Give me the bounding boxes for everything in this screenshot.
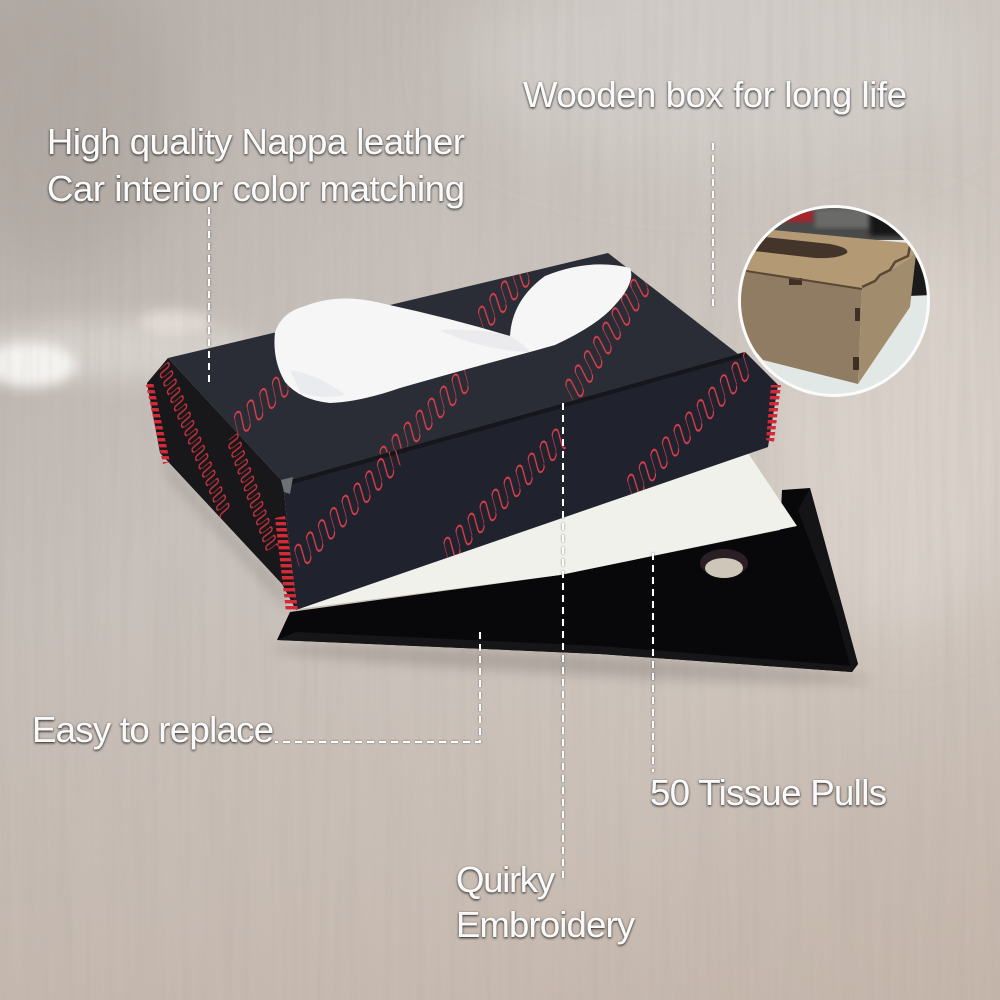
dashed leader lines [209,143,713,878]
labels [32,74,907,945]
tissue refill paper [298,453,797,609]
label: quirky: Quirky [456,859,556,900]
leader: wooden box [712,143,714,308]
tissue box [146,253,781,612]
label: easy to replace: Easy to replace [32,709,274,750]
inset box joints [740,246,910,370]
label: wooden box: Wooden box for long life [523,74,907,115]
white tissue [274,264,631,403]
inset box right face [858,254,916,384]
inset box lid [740,230,916,288]
inset circle: wooden box [738,205,930,397]
leader: nappa leather [208,207,210,384]
black felt base panel [277,488,858,672]
felt base shadow [270,638,870,690]
label: car interior color matching: Car interior color matching [47,168,465,209]
red edge stitching [146,382,781,612]
label: high quality nappa leather: High quality Nappa leather [47,121,465,162]
leader: easy to replace [275,632,480,742]
box front face [281,349,778,610]
box top face [168,253,778,482]
inset box front face [738,268,862,384]
box left side face [147,358,296,610]
box shadow on floor [160,455,290,612]
inset box slot [754,237,847,258]
hole in base [700,549,748,578]
inset blurred background objects [764,208,927,296]
label: embroidery: Embroidery [456,904,636,945]
leader: quirky embroidery [562,403,564,878]
label: tissue pulls: 50 Tissue Pulls [650,772,887,813]
leader: tissue pulls [652,553,654,772]
